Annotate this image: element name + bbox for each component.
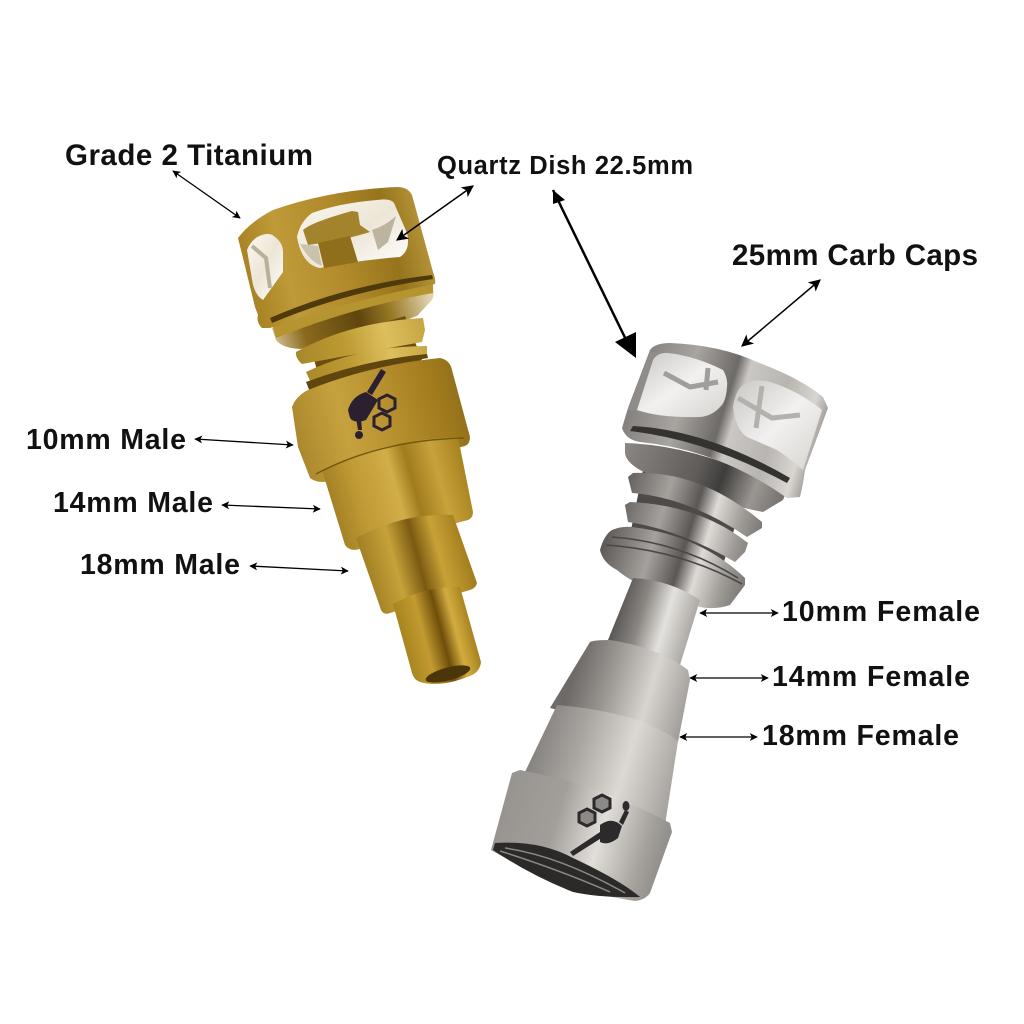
silver 18mm step [525, 705, 678, 825]
silver threaded disc [600, 527, 745, 608]
silver cap groove [630, 426, 790, 483]
arrow: 10mm Male [195, 439, 293, 445]
gold cap small window [247, 234, 283, 300]
gold step groove upper [316, 438, 464, 474]
gold top cap [238, 187, 435, 328]
honey logo on silver nail [570, 795, 630, 856]
text: 10mm Female: 10mm Female [782, 596, 980, 628]
gold neck [310, 316, 422, 388]
silver titanium nail [491, 343, 828, 901]
silver thread lines [606, 537, 742, 584]
text: Grade 2 Titanium: Grade 2 Titanium [65, 139, 313, 172]
text: 14mm Female: 14mm Female [772, 661, 970, 693]
gold lower disc under cap [272, 288, 434, 349]
gold cooling rings [296, 318, 428, 392]
label: 10mm Male [26, 424, 293, 456]
silver 10mm shaft [608, 578, 700, 665]
label: 18mm Male [80, 549, 348, 581]
silver base opening [493, 843, 640, 897]
gold 10mm collar [292, 358, 470, 482]
label: 25mm Carb Caps [732, 239, 978, 346]
label: 14mm Male [53, 487, 320, 519]
silver cap [622, 343, 828, 498]
label: Quartz Dish 22.5mm [397, 152, 693, 358]
arrow: Grade 2 Titanium [173, 171, 240, 218]
honey logo on gold nail [348, 369, 395, 439]
gold tip hole [424, 662, 472, 686]
text: 18mm Male: 18mm Male [80, 549, 240, 581]
text: 25mm Carb Caps: 25mm Carb Caps [732, 239, 978, 272]
label: Grade 2 Titanium [65, 139, 313, 218]
arrow: 25mm Carb Caps [742, 280, 820, 346]
arrow: 18mm Male [250, 566, 348, 571]
arrow: quartz dish to silver nail [553, 190, 636, 358]
arrow: 14mm Female [690, 677, 768, 679]
gold 14mm step [322, 437, 473, 550]
gold titanium nail [238, 187, 481, 686]
gold tip [393, 587, 481, 684]
gold 18mm step [356, 515, 477, 614]
silver cap right window [733, 380, 822, 470]
text: 14mm Male: 14mm Male [53, 487, 213, 519]
arrow: 18mm Female [680, 736, 757, 738]
text: Quartz Dish 22.5mm: Quartz Dish 22.5mm [437, 152, 693, 180]
silver neck [625, 460, 745, 590]
gold disc light band [272, 282, 433, 338]
silver base ring [491, 770, 672, 901]
gold cap large window [297, 199, 408, 268]
arrow: 10mm Female [700, 612, 778, 614]
silver cooling rings [625, 473, 762, 562]
gold cap groove [270, 275, 433, 323]
arrow: quartz dish to gold nail [397, 186, 473, 240]
silver lower disc [625, 443, 787, 512]
silver cap left window [628, 352, 727, 417]
arrow: 14mm Male [222, 505, 320, 509]
text: 10mm Male: 10mm Male [26, 424, 186, 456]
silver 14mm step [550, 640, 690, 742]
text: 18mm Female: 18mm Female [762, 720, 959, 752]
